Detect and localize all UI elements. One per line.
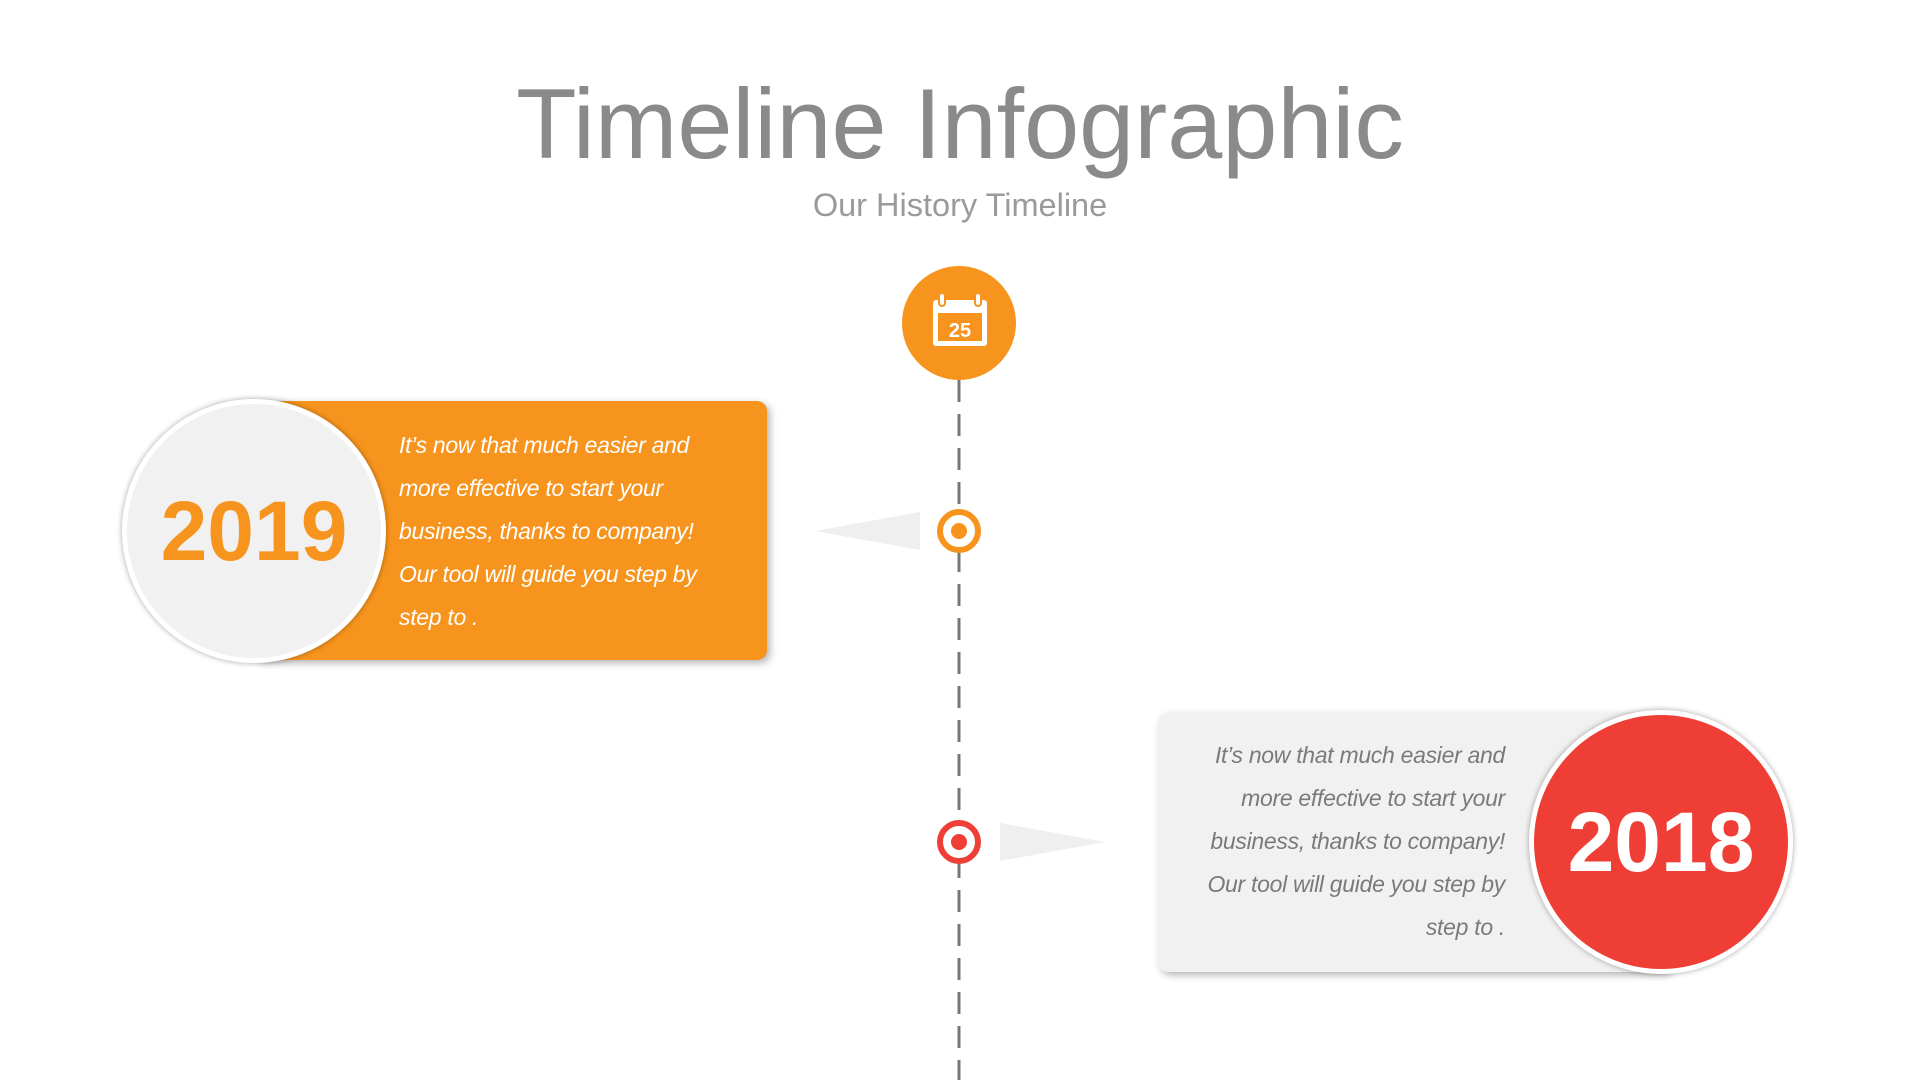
marker: 2019 xyxy=(937,509,981,553)
panel: 2018 xyxy=(1156,706,1796,980)
card background xyxy=(1158,713,1671,972)
year circle 2019 xyxy=(122,399,386,663)
description text: Our tool will guide you step by xyxy=(1207,871,1505,897)
panel: 2019 xyxy=(118,396,774,668)
description text: more effective to start your xyxy=(1241,785,1505,811)
description text: Our tool will guide you step by xyxy=(399,561,697,587)
year circle 2019: 2019 xyxy=(161,484,347,578)
description text: more effective to start your xyxy=(399,475,663,501)
description text xyxy=(1207,742,1506,940)
marker: 2018 xyxy=(937,820,981,864)
card background xyxy=(254,401,767,660)
title: Timeline Infographic xyxy=(516,68,1404,179)
description text: step to . xyxy=(1426,914,1505,940)
description text: It’s now that much easier and xyxy=(1215,742,1505,768)
icon: calendar: 25 xyxy=(949,320,971,342)
description text xyxy=(399,432,698,630)
description text: business, thanks to company! xyxy=(399,518,694,544)
year circle 2018: 2018 xyxy=(1568,795,1754,889)
arrow: pointer to 2018 xyxy=(1000,823,1104,861)
year circle 2018 xyxy=(1529,710,1793,974)
subtitle: Our History Timeline xyxy=(813,187,1107,223)
description text: step to . xyxy=(399,604,478,630)
description text: business, thanks to company! xyxy=(1210,828,1505,854)
icon: calendar xyxy=(902,266,1016,380)
description text: It’s now that much easier and xyxy=(399,432,689,458)
arrow: pointer to 2019 xyxy=(816,512,920,550)
